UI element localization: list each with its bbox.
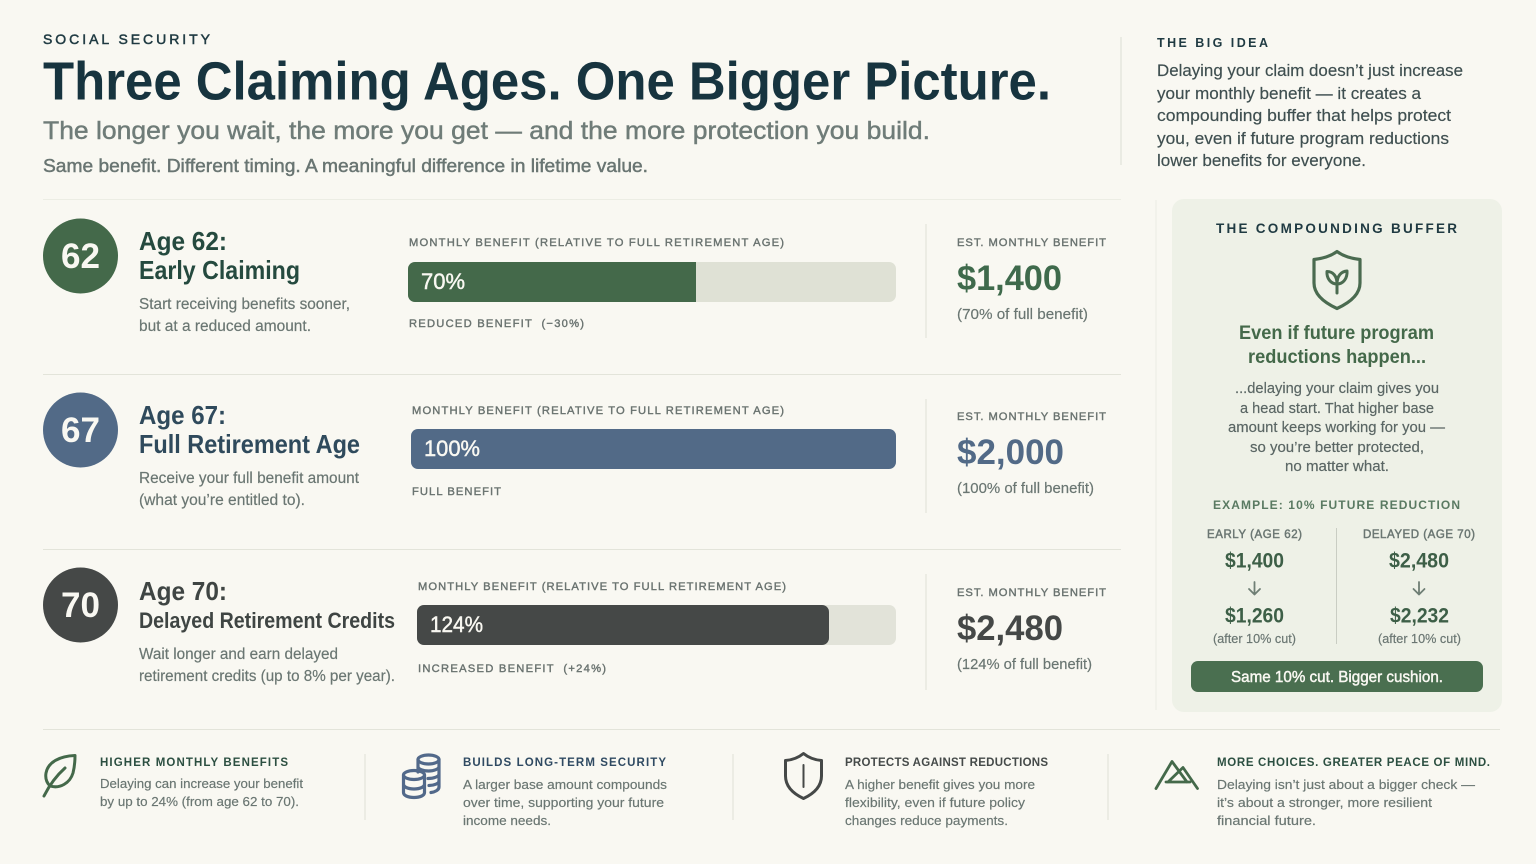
- footer item: protects against reductions: [786, 754, 1048, 828]
- bar chart age 62: REDUCED BENEFIT (−30%): [409, 318, 584, 330]
- estimate age 62: [957, 237, 1106, 323]
- bar chart age 67: MONTHLY BENEFIT (RELATIVE TO FULL RETIREMENT AGE): [412, 405, 784, 417]
- big idea paragraph: lower benefits for everyone.: [1157, 151, 1366, 170]
- estimate age 62: $1,400: [957, 259, 1062, 298]
- panel body text: a head start. That higher base: [1240, 401, 1434, 417]
- bar chart age 67: FULL BENEFIT: [412, 486, 501, 498]
- body: financial future.: [1217, 813, 1316, 828]
- icon: coin stacks: [404, 755, 439, 798]
- panel body text: [1228, 381, 1446, 475]
- estimate age 70: EST. MONTHLY BENEFIT: [957, 587, 1106, 599]
- example: delayed: DELAYED (AGE 70): [1363, 529, 1475, 541]
- row: age 62: [43, 218, 1106, 338]
- bar chart age 67: [411, 405, 896, 498]
- body: Delaying isn’t just about a bigger check —: [1217, 777, 1475, 792]
- bar chart age 70: [417, 581, 896, 675]
- big idea paragraph: you, even if future program reductions: [1157, 129, 1449, 148]
- heading: BUILDS LONG-TERM SECURITY: [463, 757, 666, 769]
- example: early: [1207, 529, 1302, 646]
- example: early: EARLY (AGE 62): [1207, 529, 1302, 541]
- panel heading: THE COMPOUNDING BUFFER: [1216, 221, 1457, 236]
- panel body text: so you’re better protected,: [1250, 440, 1424, 456]
- description age 62: [139, 296, 350, 335]
- heading: HIGHER MONTHLY BENEFITS: [100, 757, 288, 769]
- body: by up to 24% (from age 62 to 70).: [100, 794, 299, 809]
- panel callout heading: [1239, 322, 1434, 368]
- heading age 70: Age 70:: [139, 576, 227, 606]
- description age 62: Start receiving benefits sooner,: [139, 296, 350, 313]
- badge 70: [43, 568, 118, 642]
- heading age 67: [139, 400, 360, 459]
- the big idea block: [1157, 36, 1463, 170]
- heading age 62: [139, 226, 300, 285]
- example: early: $1,400: [1225, 550, 1284, 572]
- icon: mountains: [1156, 762, 1198, 788]
- badge 62: [43, 218, 118, 294]
- heading age 70: Delayed Retirement Credits: [139, 608, 395, 633]
- panel: the compounding buffer: [1172, 199, 1502, 712]
- heading: MORE CHOICES. GREATER PEACE OF MIND.: [1217, 757, 1490, 769]
- body: flexibility, even if future policy: [845, 795, 1026, 810]
- estimate age 62: (70% of full benefit): [957, 306, 1088, 323]
- example: delayed: [1363, 529, 1475, 646]
- bar chart age 70: MONTHLY BENEFIT (RELATIVE TO FULL RETIREMENT AGE): [418, 581, 786, 593]
- estimate age 62: EST. MONTHLY BENEFIT: [957, 237, 1106, 249]
- body: A higher benefit gives you more: [845, 777, 1035, 792]
- badge 67: 67: [61, 411, 100, 450]
- heading age 62: Early Claiming: [139, 255, 300, 285]
- big idea paragraph: [1157, 61, 1463, 170]
- badge 62: 62: [61, 237, 100, 276]
- callout button: [1191, 661, 1483, 692]
- heading age 67: Full Retirement Age: [139, 429, 360, 459]
- panel body text: amount keeps working for you —: [1228, 420, 1446, 436]
- heading: PROTECTS AGAINST REDUCTIONS: [845, 757, 1048, 769]
- big idea paragraph: Delaying your claim doesn’t just increase: [1157, 61, 1463, 80]
- description age 62: but at a reduced amount.: [139, 318, 311, 335]
- arrow: early reduction: [1249, 582, 1260, 594]
- estimate age 67: EST. MONTHLY BENEFIT: [957, 411, 1106, 423]
- estimate age 70: (124% of full benefit): [957, 656, 1092, 673]
- heading age 62: Age 62:: [139, 226, 227, 256]
- icon: shield with sprout: [1314, 252, 1360, 308]
- eyebrow: SOCIAL SECURITY: [43, 31, 211, 47]
- estimate age 67: (100% of full benefit): [957, 480, 1094, 497]
- bar chart age 62: MONTHLY BENEFIT (RELATIVE TO FULL RETIREMENT AGE): [409, 237, 784, 249]
- body: [1217, 777, 1475, 828]
- arrow: delayed reduction: [1414, 582, 1424, 594]
- panel body text: ...delaying your claim gives you: [1235, 381, 1439, 397]
- row: age 67: [43, 392, 1106, 513]
- header: title block: [43, 31, 1051, 176]
- tagline: Same benefit. Different timing. A meaningful difference in lifetime value.: [43, 156, 648, 176]
- body: changes reduce payments.: [845, 813, 1008, 828]
- panel callout heading: reductions happen...: [1248, 346, 1426, 368]
- footer item: higher monthly benefits: [44, 756, 303, 809]
- example: early: $1,260: [1225, 604, 1284, 628]
- bar chart age 62: [408, 237, 896, 330]
- description age 67: Receive your full benefit amount: [139, 470, 360, 487]
- heading age 67: Age 67:: [139, 400, 226, 430]
- estimate age 67: [957, 411, 1106, 497]
- body: income needs.: [463, 813, 551, 828]
- row: age 70: [43, 568, 1106, 690]
- bar chart age 67: 100%: [424, 436, 480, 461]
- panel callout heading: Even if future program: [1239, 322, 1434, 344]
- callout button: Same 10% cut. Bigger cushion.: [1231, 669, 1443, 686]
- icon: shield: [786, 754, 822, 798]
- body: [463, 777, 668, 828]
- estimate age 67: $2,000: [957, 433, 1064, 472]
- bar chart age 70: 124%: [430, 612, 483, 637]
- estimate age 70: [957, 587, 1106, 673]
- body: A larger base amount compounds: [463, 777, 668, 792]
- body: Delaying can increase your benefit: [100, 776, 303, 791]
- bar chart age 70: INCREASED BENEFIT (+24%): [418, 663, 606, 675]
- big idea paragraph: compounding buffer that helps protect: [1157, 106, 1451, 125]
- description age 70: [139, 646, 395, 685]
- panel body text: no matter what.: [1285, 459, 1389, 475]
- description age 70: Wait longer and earn delayed: [139, 646, 338, 663]
- bar chart age 62: 70%: [421, 269, 465, 294]
- body: it’s about a stronger, more resilient: [1217, 795, 1432, 810]
- example: delayed: $2,232: [1390, 604, 1449, 628]
- footer item: builds long-term security: [404, 755, 668, 828]
- big idea heading: THE BIG IDEA: [1157, 36, 1268, 50]
- description age 67: (what you’re entitled to).: [139, 492, 305, 509]
- title: Three Claiming Ages. One Bigger Picture.: [43, 52, 1051, 112]
- body: [100, 776, 303, 809]
- footer item: more choices, greater peace of mind: [1156, 757, 1490, 828]
- badge 67: [43, 392, 118, 468]
- big idea paragraph: your monthly benefit — it creates a: [1157, 84, 1422, 103]
- description age 70: retirement credits (up to 8% per year).: [139, 668, 395, 685]
- description age 67: [139, 470, 360, 509]
- body: over time, supporting your future: [463, 795, 664, 810]
- example heading: EXAMPLE: 10% FUTURE REDUCTION: [1213, 498, 1460, 512]
- body: [845, 777, 1035, 828]
- estimate age 70: $2,480: [957, 609, 1063, 648]
- subtitle: The longer you wait, the more you get — and the more protection you build.: [43, 117, 930, 145]
- badge 70: 70: [61, 586, 100, 625]
- example: delayed: $2,480: [1389, 550, 1449, 572]
- heading age 70: [139, 576, 395, 633]
- example: delayed: (after 10% cut): [1378, 632, 1461, 646]
- example: early: (after 10% cut): [1213, 632, 1296, 646]
- icon: leaf: [44, 756, 75, 796]
